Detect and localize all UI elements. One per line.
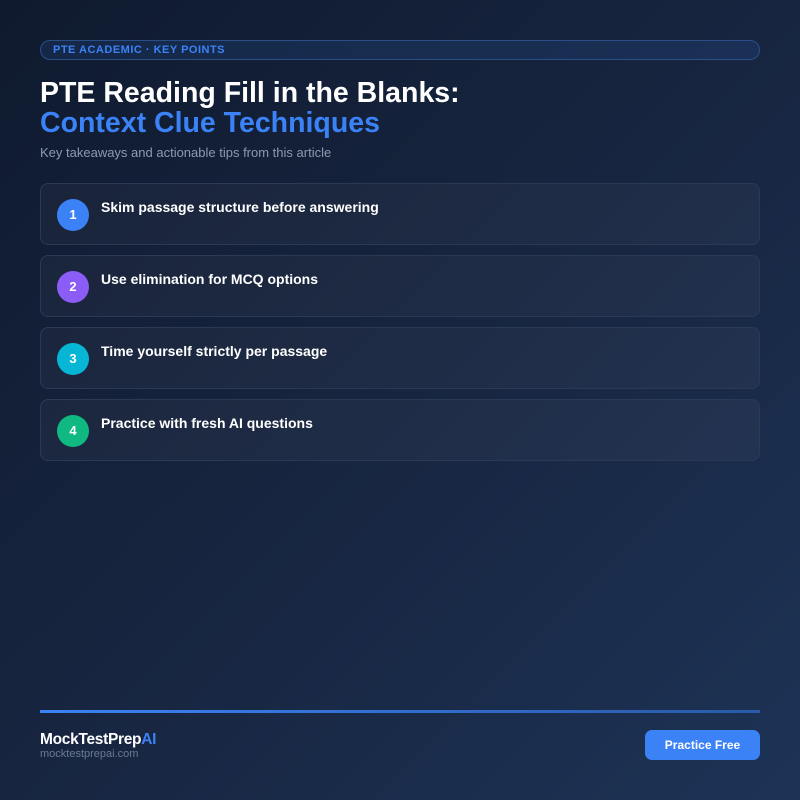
url: mocktestprepai.com	[40, 748, 138, 760]
card 4	[40, 399, 760, 461]
title: PTE Reading Fill in the Blanks:	[40, 77, 460, 109]
brand: MockTestPrepAI	[40, 731, 156, 748]
card 3: Time yourself strictly per passage	[101, 343, 327, 359]
card 2: Use elimination for MCQ options	[101, 271, 318, 287]
button: Practice Free	[665, 738, 740, 752]
card 1: Skim passage structure before answering	[101, 199, 379, 215]
button	[645, 730, 760, 760]
title: Context Clue Techniques	[40, 107, 380, 139]
tag pill: PTE ACADEMIC · KEY POINTS	[53, 44, 225, 56]
card 2	[40, 255, 760, 317]
card 4: 4	[69, 423, 77, 438]
card 3: 3	[69, 351, 77, 366]
card 1: 1	[69, 207, 77, 222]
tag pill	[40, 40, 760, 60]
card 2: 2	[69, 279, 77, 294]
card 3	[40, 327, 760, 389]
card 4: Practice with fresh AI questions	[101, 415, 313, 431]
card 1	[40, 183, 760, 245]
title	[40, 77, 460, 139]
subtitle: Key takeaways and actionable tips from this article	[40, 145, 331, 160]
